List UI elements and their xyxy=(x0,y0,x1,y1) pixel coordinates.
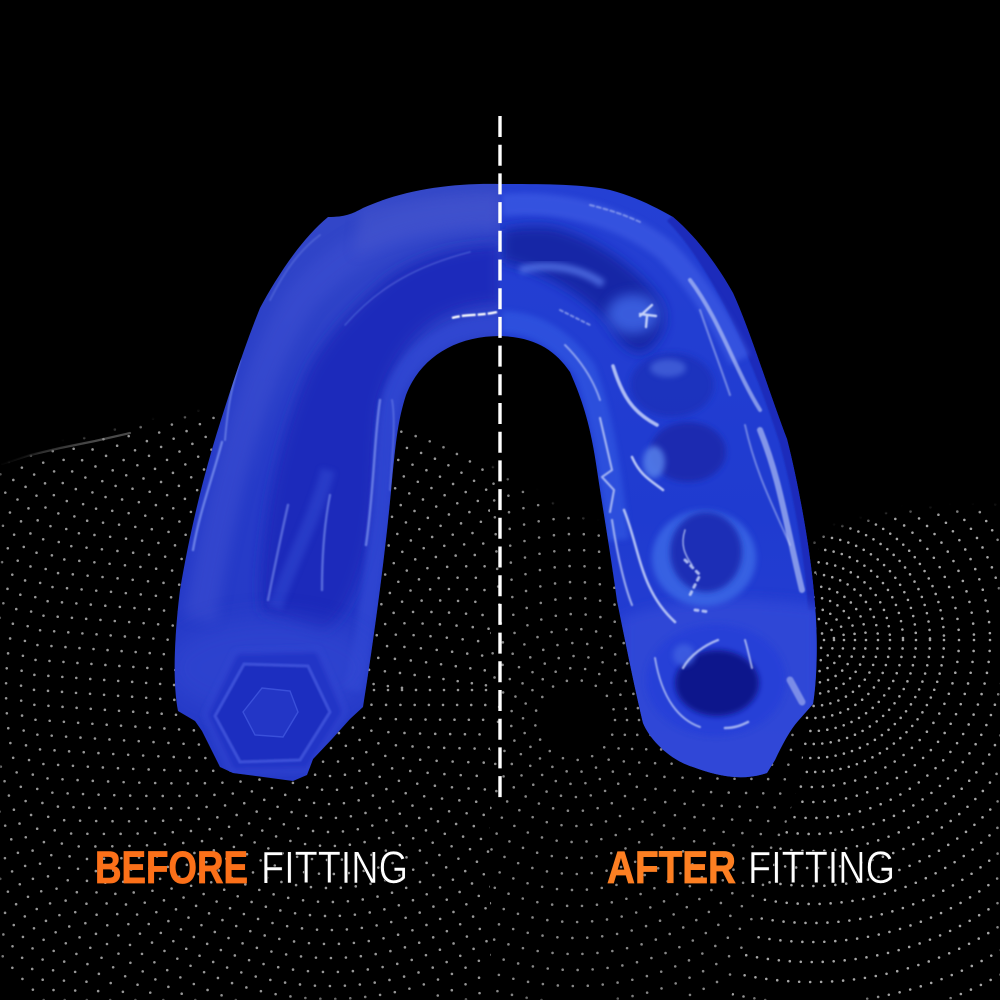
label: before fitting: FITTING xyxy=(261,842,408,893)
hexagon base xyxy=(212,654,338,776)
inner lip xyxy=(359,320,496,656)
molar 3 xyxy=(652,510,756,606)
left ridge highlight xyxy=(2,433,130,464)
label: after fitting: AFTER xyxy=(607,842,736,893)
right dot field, inner xyxy=(802,518,946,774)
top glare xyxy=(360,197,492,238)
outer rim light band xyxy=(188,306,302,618)
outer dark rim xyxy=(672,216,815,610)
channel highlight band xyxy=(520,266,603,284)
lower light body xyxy=(620,600,820,790)
mouthguard after fitting xyxy=(500,170,830,800)
label: before fitting: BEFORE xyxy=(95,842,248,893)
glossy streaks xyxy=(560,205,802,728)
glossy streaks xyxy=(193,235,470,600)
middle dot field xyxy=(490,466,816,1000)
molar 2 xyxy=(650,422,726,482)
dotted terrain background xyxy=(0,410,1000,1000)
front band xyxy=(502,322,618,540)
channel centre ridge xyxy=(275,470,328,608)
label: after fitting xyxy=(607,842,895,893)
light ellipse xyxy=(607,294,659,334)
dashed divider line xyxy=(498,116,502,798)
upper rim light xyxy=(502,204,740,360)
right dot field, outer xyxy=(732,504,1000,1000)
dark channel xyxy=(502,226,664,352)
label: before fitting xyxy=(95,842,408,893)
hexagon bolt xyxy=(243,688,298,737)
mouthguard before fitting xyxy=(174,184,500,781)
glare on front xyxy=(452,312,497,318)
molar 1 xyxy=(630,353,714,417)
lower body lighter xyxy=(174,622,372,700)
left dot field xyxy=(0,410,490,1000)
label: after fitting: FITTING xyxy=(748,842,895,893)
inner channel xyxy=(260,245,500,632)
molar 4 xyxy=(646,624,786,736)
